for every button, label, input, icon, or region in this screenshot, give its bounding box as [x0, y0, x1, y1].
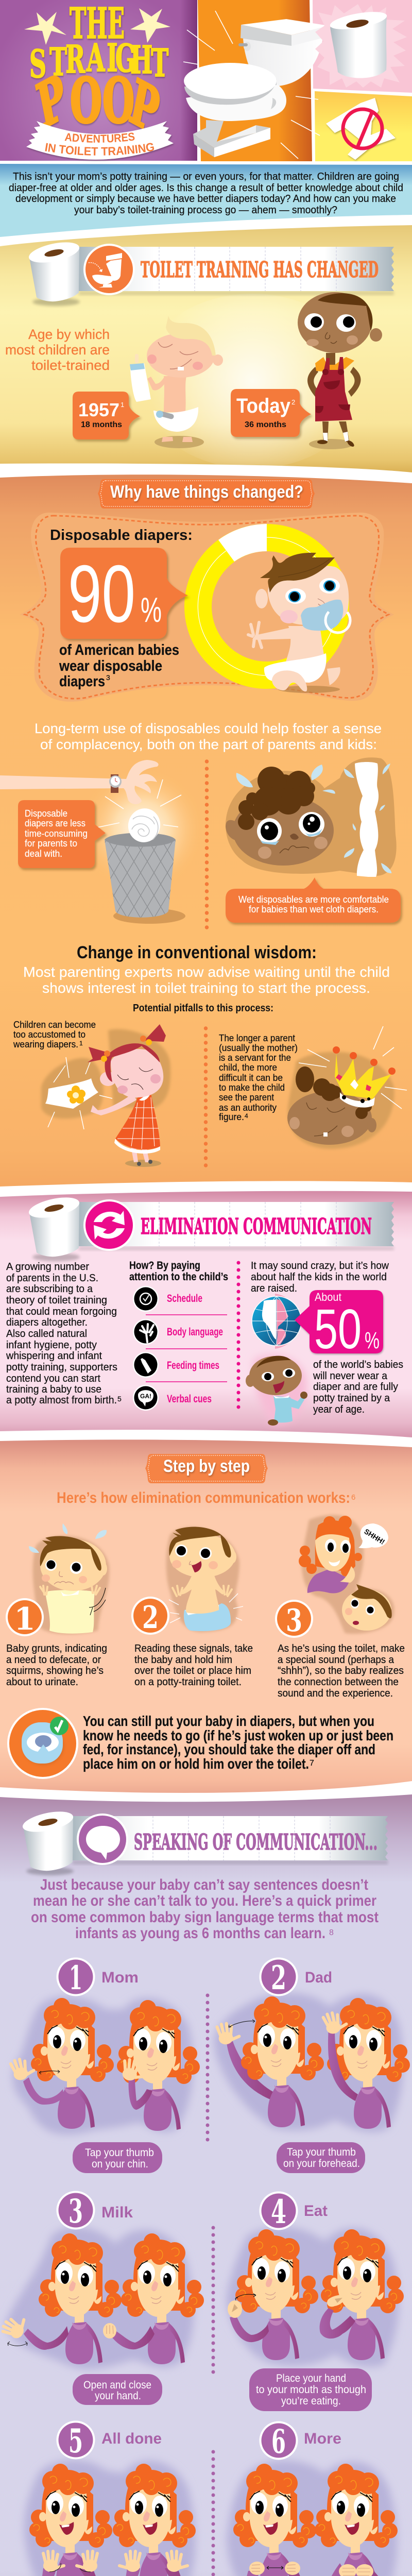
title: POOP: POOP — [32, 61, 164, 147]
heading badge: why have things changed: Why have things changed? — [110, 482, 303, 502]
text: step 2: Reading these signals, take — [134, 1643, 253, 1654]
text: sign language intro: infants as young as 6 months can learn. — [75, 1925, 325, 1942]
callout: wet disposables — [226, 877, 401, 923]
icon: speech bubble — [77, 1814, 128, 1865]
illustration: kid with crown — [287, 1026, 407, 1149]
text: most parenting experts — [23, 964, 390, 996]
icon: crown — [333, 1046, 396, 1108]
callout: today: 36 months — [245, 420, 286, 429]
panel: orange toilet background — [198, 0, 312, 161]
icon: globe half highlighted — [252, 1294, 301, 1349]
icon: speech bubble SHHH: SHHH! — [363, 1527, 386, 1546]
text: of the world's babies: diaper and are fully — [313, 1381, 398, 1393]
heading banner: toilet training has changed — [27, 239, 394, 306]
chart: 90 percent donut — [198, 524, 336, 675]
panel: purple title background — [0, 0, 197, 161]
icon: kid's head — [226, 767, 334, 866]
callout: wet disposables: for babies than wet cloth diapers. — [249, 904, 379, 914]
caption: to your mouth as though — [256, 2384, 366, 2396]
text: step 3: As he’s using the toilet, make — [278, 1643, 405, 1654]
text: of American babies: 3 — [106, 673, 110, 682]
title: ribbon subtitle: ADVENTURES — [65, 133, 135, 143]
icon row: feeding times: Feeding times — [167, 1360, 219, 1371]
text: step 3: the connection between the — [278, 1676, 399, 1688]
illustration: girl refusing underwear — [41, 1024, 170, 1167]
text: a growing number: are subscribing to a — [6, 1283, 93, 1295]
label: mom: Mom — [101, 1969, 139, 1986]
icon row: schedule: Schedule — [167, 1293, 202, 1304]
icon: number 3: 3 — [286, 1603, 302, 1639]
text: may sound crazy: It may sound crazy, but it’s how — [251, 1260, 389, 1272]
illustration: step 3 mom and baby — [275, 1515, 394, 1639]
illustration: crying kid and wet cloth diaper — [226, 757, 397, 877]
icon: number 2: 2 — [142, 1600, 159, 1636]
icon row: verbal cues: GA! — [140, 1393, 151, 1400]
text: you can still put your baby in diapers — [83, 1713, 393, 1772]
caption — [249, 2368, 372, 2411]
text: age by which: toilet-trained — [31, 358, 110, 373]
text: intro paragraph: This isn’t your mom’s potty training — or even yours, for that matter. Children are going — [13, 171, 399, 182]
icon: twisted cloth diaper — [355, 762, 379, 877]
text: may sound crazy: about half the kids in the world — [251, 1272, 387, 1283]
text: of the world's babies — [313, 1359, 403, 1415]
icon: mom — [299, 1516, 362, 1594]
title: stars — [24, 8, 170, 45]
heading badge: step by step — [145, 1454, 268, 1483]
text: most parenting experts: shows interest in toilet training to start the process. — [42, 980, 370, 996]
icon: underwear — [45, 1078, 98, 1109]
text: intro paragraph: your baby’s toilet-training process go — ahem — smoothly? — [74, 205, 337, 216]
callout: today: 2 — [291, 398, 295, 406]
text: here's how elimination communication works: 6 — [351, 1493, 355, 1502]
text: step 2: on a potty-training toilet. — [134, 1676, 242, 1688]
icon: toilet paper roll in sunburst — [315, 4, 407, 88]
icon: number 5 — [57, 2420, 95, 2461]
text: longer a parent is a servant: The longer a parent — [219, 1033, 295, 1043]
callout: 1957: 1 — [121, 401, 124, 409]
callout: about 50% — [295, 1290, 383, 1361]
figure: thumb on forehead — [323, 1998, 410, 2129]
figure: open hand — [1, 2233, 122, 2364]
caption: on your chin. — [92, 2158, 148, 2170]
text: long-term use of disposables: Long-term use of disposables could help foster a sense — [35, 721, 382, 736]
panel: sign shadows — [5, 1993, 403, 2576]
text: long-term use of disposables — [35, 721, 382, 752]
text: longer a parent is a servant: as an authority — [219, 1103, 277, 1113]
text: of American babies: diapers — [59, 673, 105, 690]
icon: number 6 — [260, 2421, 298, 2461]
text: intro paragraph: diaper-free at older and older ages. Is this change a result of better knowledge about child — [9, 182, 403, 194]
text: a growing number: potty training, supporters — [6, 1362, 117, 1373]
callout: 90%: 90 — [68, 549, 135, 639]
icon row: schedule — [133, 1286, 202, 1312]
text: here's how elimination communication works: Here’s how elimination communication works: — [57, 1489, 350, 1506]
text: longer a parent is a servant: figure. — [219, 1112, 244, 1122]
text: children accustomed: 1 — [79, 1040, 83, 1047]
figure: thumb away from forehead — [217, 1996, 324, 2127]
sign 1: mom — [10, 1958, 200, 2173]
text: step 1 — [6, 1643, 107, 1688]
callout: 90%: % — [141, 590, 162, 630]
text: of the world's babies: of the world’s babies — [313, 1359, 403, 1370]
icon: crossed-out diaper — [326, 98, 396, 160]
sign 4: eat — [228, 2192, 404, 2411]
illustration: baby with bottle — [130, 316, 223, 448]
text: longer a parent is a servant: child, the more — [219, 1062, 277, 1073]
text: of the world's babies: will never wear a — [313, 1370, 388, 1382]
illustration: baby in blue pajamas — [246, 1355, 307, 1426]
panel: elimination communication — [0, 1191, 412, 1437]
icon: burst rays around toilet — [183, 11, 320, 159]
sign 2: dad — [217, 1958, 410, 2173]
sign 3: milk — [1, 2191, 204, 2405]
icon: number 3 — [57, 2191, 95, 2231]
text: a growing number: of parents in the U.S. — [6, 1273, 98, 1284]
sign 6: more — [233, 2421, 398, 2576]
title: ribbon subtitle — [26, 121, 174, 162]
figure: closed fist — [103, 2233, 204, 2364]
text: you can still put your baby in diapers: place him on or hold him over the toilet. — [83, 1756, 309, 1772]
caption: Tap your thumb — [85, 2147, 154, 2159]
text: long-term use of disposables: of complacency, both on the part of parents and kids: — [40, 737, 377, 752]
caption — [277, 2142, 365, 2173]
icon: toilet — [184, 19, 329, 157]
text: a growing number: Also called natural — [6, 1328, 87, 1340]
icon: number 1 — [6, 1598, 44, 1637]
callout: disposable diapers less time-consuming: diapers are less — [25, 818, 85, 828]
callout: disposable diapers less time-consuming: for parents to — [25, 838, 77, 849]
text: a growing number: diapers altogether. — [6, 1317, 88, 1328]
panel: why have things changed — [0, 474, 412, 1187]
panel: blue intro — [0, 164, 412, 237]
callout: today: Today — [236, 395, 291, 417]
panel: speaking of communication — [0, 1794, 412, 2576]
text: how by paying attention — [129, 1260, 228, 1283]
icon: toilet emblem — [83, 244, 135, 295]
text: a growing number: 5 — [117, 1395, 122, 1403]
title: STRAIGHT: STRAIGHT — [29, 35, 169, 87]
icon: arm with watch — [0, 760, 159, 804]
text: how by paying attention: attention to the child’s — [129, 1271, 228, 1283]
icon: trash can — [105, 833, 176, 918]
icon row: body language — [133, 1319, 223, 1345]
callout: about 50%: 50 — [314, 1298, 362, 1361]
text: a growing number: whispering and infant — [6, 1350, 102, 1362]
callout: disposable diapers less time-consuming: time-consuming — [25, 828, 88, 839]
icon: number 4: 4 — [271, 2193, 286, 2231]
caption — [73, 2142, 162, 2173]
text: of the world's babies: potty trained by a — [313, 1393, 390, 1404]
text: step 3 — [278, 1643, 405, 1699]
figure: palms in — [113, 2464, 196, 2576]
callout: 1957 — [73, 392, 140, 439]
text: longer a parent is a servant: see the parent — [219, 1092, 274, 1103]
icon: circular arrows — [83, 1199, 135, 1251]
figure: fingertips together — [315, 2464, 398, 2576]
callout: disposable diapers less time-consuming: Disposable — [25, 808, 67, 819]
icon: number 3 — [275, 1600, 313, 1639]
text: longer a parent is a servant: 4 — [245, 1112, 248, 1120]
title: ribbon subtitle: IN TOILET TRAINING — [45, 143, 154, 156]
text: a growing number — [6, 1261, 122, 1406]
text: intro paragraph: development or simply because we have better diapers today? And how can you make — [15, 193, 396, 205]
text: of American babies — [59, 642, 179, 690]
icon row: verbal cues: Verbal cues — [167, 1393, 212, 1405]
text: age by which: most children are — [5, 342, 110, 358]
icon: balled diaper — [125, 805, 164, 846]
text: may sound crazy: are raised. — [251, 1283, 297, 1294]
text: of American babies: of American babies — [59, 642, 179, 658]
icon row: verbal cues — [133, 1385, 212, 1411]
icon: tear drops — [236, 764, 391, 873]
text: a growing number: that could mean forgoing — [6, 1306, 117, 1317]
label: more: More — [304, 2430, 341, 2447]
text: potential pitfalls: Potential pitfalls to this process: — [133, 1003, 273, 1014]
text: intro paragraph — [9, 171, 403, 216]
text: step 3: sound and the experience. — [278, 1688, 393, 1699]
icon row: feeding times — [133, 1352, 219, 1378]
text: step 1: squirms, showing he’s — [6, 1665, 104, 1676]
text: sign language intro: 8 — [329, 1928, 334, 1937]
text: a growing number: A growing number — [6, 1261, 89, 1273]
text: of American babies: wear disposable — [59, 658, 162, 674]
icon: baby — [342, 1584, 392, 1631]
figure: thumb on chin — [117, 2000, 200, 2131]
text: step 1: a need to defecate, or — [6, 1654, 101, 1666]
panel: toilet training has changed — [0, 225, 412, 472]
caption: Place your hand — [276, 2372, 346, 2384]
text: you can still put your baby in diapers: 7 — [310, 1759, 314, 1768]
panel: disposable diapers frame — [20, 513, 394, 702]
text: step 2 — [134, 1643, 253, 1688]
text: longer a parent is a servant: to make the child — [219, 1082, 285, 1093]
caption: your hand. — [95, 2390, 141, 2402]
text: a growing number: a potty almost from birth. — [6, 1395, 117, 1406]
caption: on your forehead. — [283, 2158, 360, 2170]
icon: number 2 — [260, 1958, 298, 1997]
icon: motion rays — [97, 779, 181, 827]
figure: hand away from mouth — [228, 2229, 318, 2360]
callout: 1957: 1957 — [78, 399, 119, 420]
text: sign language intro — [31, 1876, 379, 1942]
illustration: baby with pacifier — [248, 553, 355, 693]
icon: speech bubble SHHH — [358, 1523, 388, 1548]
text: children accustomed: wearing diapers. — [13, 1039, 78, 1049]
text: step 2: the baby and hold him — [134, 1654, 232, 1666]
text: age by which — [5, 327, 110, 373]
text: age by which: Age by which — [28, 327, 110, 342]
icon: potty with check mark — [7, 1708, 78, 1779]
text: longer a parent is a servant — [219, 1033, 298, 1122]
callout: disposable diapers less time-consuming: deal with. — [25, 849, 62, 859]
text: step 3: “shhh”), so the baby realizes — [278, 1665, 404, 1676]
icon: number 1: 1 — [69, 1959, 82, 1997]
callout: 1957: 18 months — [81, 420, 122, 429]
figure: hand at mouth — [320, 2229, 404, 2360]
caption — [73, 2374, 162, 2405]
icon: number 1 — [57, 1958, 95, 1997]
icon: number 2 — [131, 1597, 169, 1636]
icon: number 5: 5 — [68, 2422, 83, 2461]
callout: disposable diapers less time-consuming — [18, 800, 106, 868]
icon row: body language: Body language — [167, 1326, 223, 1338]
text: children accustomed — [13, 1020, 96, 1049]
text: longer a parent is a servant: is a servant for the — [219, 1053, 291, 1063]
text: a growing number: contend you can start — [6, 1373, 100, 1384]
illustration: hand dropping diaper in trash — [0, 760, 207, 924]
text: step 2: over the toilet or place him — [134, 1665, 251, 1676]
callout: about 50%: % — [365, 1327, 380, 1353]
caption: Tap your thumb — [287, 2146, 356, 2158]
heading: change in conventional wisdom: Change in conventional wisdom: — [77, 943, 317, 962]
text: a growing number: training a baby to use — [6, 1384, 101, 1395]
icon: number 6: 6 — [271, 2422, 286, 2461]
text: children accustomed: too accustomed to — [13, 1029, 85, 1040]
text: longer a parent is a servant: difficult it can be — [219, 1073, 283, 1083]
text: how by paying attention: How? By paying — [129, 1260, 200, 1272]
icon: number 2: 2 — [271, 1959, 286, 1997]
heading badge: step by step: Step by step — [163, 1456, 250, 1476]
figure: thumb away from chin — [10, 1998, 114, 2129]
illustration: step 2 baby on potty — [131, 1527, 243, 1636]
panel: pink toilet paper background — [313, 0, 412, 93]
icon: girl's dress — [114, 1093, 160, 1154]
heading banner: elimination communication — [27, 1194, 394, 1261]
panel: step by step — [0, 1439, 412, 1793]
text: a growing number: infant hygiene, potty — [6, 1340, 97, 1351]
text: most parenting experts: Most parenting experts now advise waiting until the child — [23, 964, 390, 980]
text: may sound crazy — [251, 1260, 389, 1294]
text: step 1: about to urinate. — [6, 1676, 78, 1688]
text: of the world's babies: year of age. — [313, 1404, 365, 1415]
text: children accustomed: Children can become — [13, 1020, 96, 1030]
label: eat: Eat — [304, 2202, 328, 2219]
illustration: today's kid in overalls — [298, 292, 382, 449]
label: milk: Milk — [101, 2204, 133, 2221]
figure: palms out — [29, 2464, 112, 2576]
label: dad: Dad — [305, 1969, 332, 1986]
title: THE: THE — [70, 0, 125, 48]
icon: number 3: 3 — [68, 2192, 83, 2231]
figure: fingertips apart — [233, 2464, 316, 2576]
illustration: step 1 baby — [6, 1523, 109, 1637]
callout: about 50%: About — [315, 1291, 341, 1303]
heading badge: why have things changed — [98, 479, 315, 509]
text: disposable diapers heading: Disposable diapers: — [50, 527, 193, 544]
text: longer a parent is a servant: (usually the mother) — [219, 1043, 298, 1053]
label: all done: All done — [101, 2430, 162, 2447]
heading banner: speaking of communication — [21, 1808, 388, 1875]
callout: wet disposables: Wet disposables are more comfortable — [238, 894, 389, 905]
icon: number 4 — [260, 2192, 298, 2231]
callout: today — [231, 389, 311, 437]
text: step 3: a special sound (perhaps a — [278, 1654, 394, 1666]
icon: number 1: 1 — [14, 1601, 36, 1637]
text: step 1: Baby grunts, indicating — [6, 1643, 107, 1654]
sign 5: all done — [29, 2420, 196, 2576]
caption: Open and close — [83, 2379, 151, 2391]
text: a growing number: theory of toilet training — [6, 1295, 107, 1306]
panel: yellow no diaper background — [315, 91, 412, 161]
caption: you’re eating. — [281, 2395, 341, 2407]
